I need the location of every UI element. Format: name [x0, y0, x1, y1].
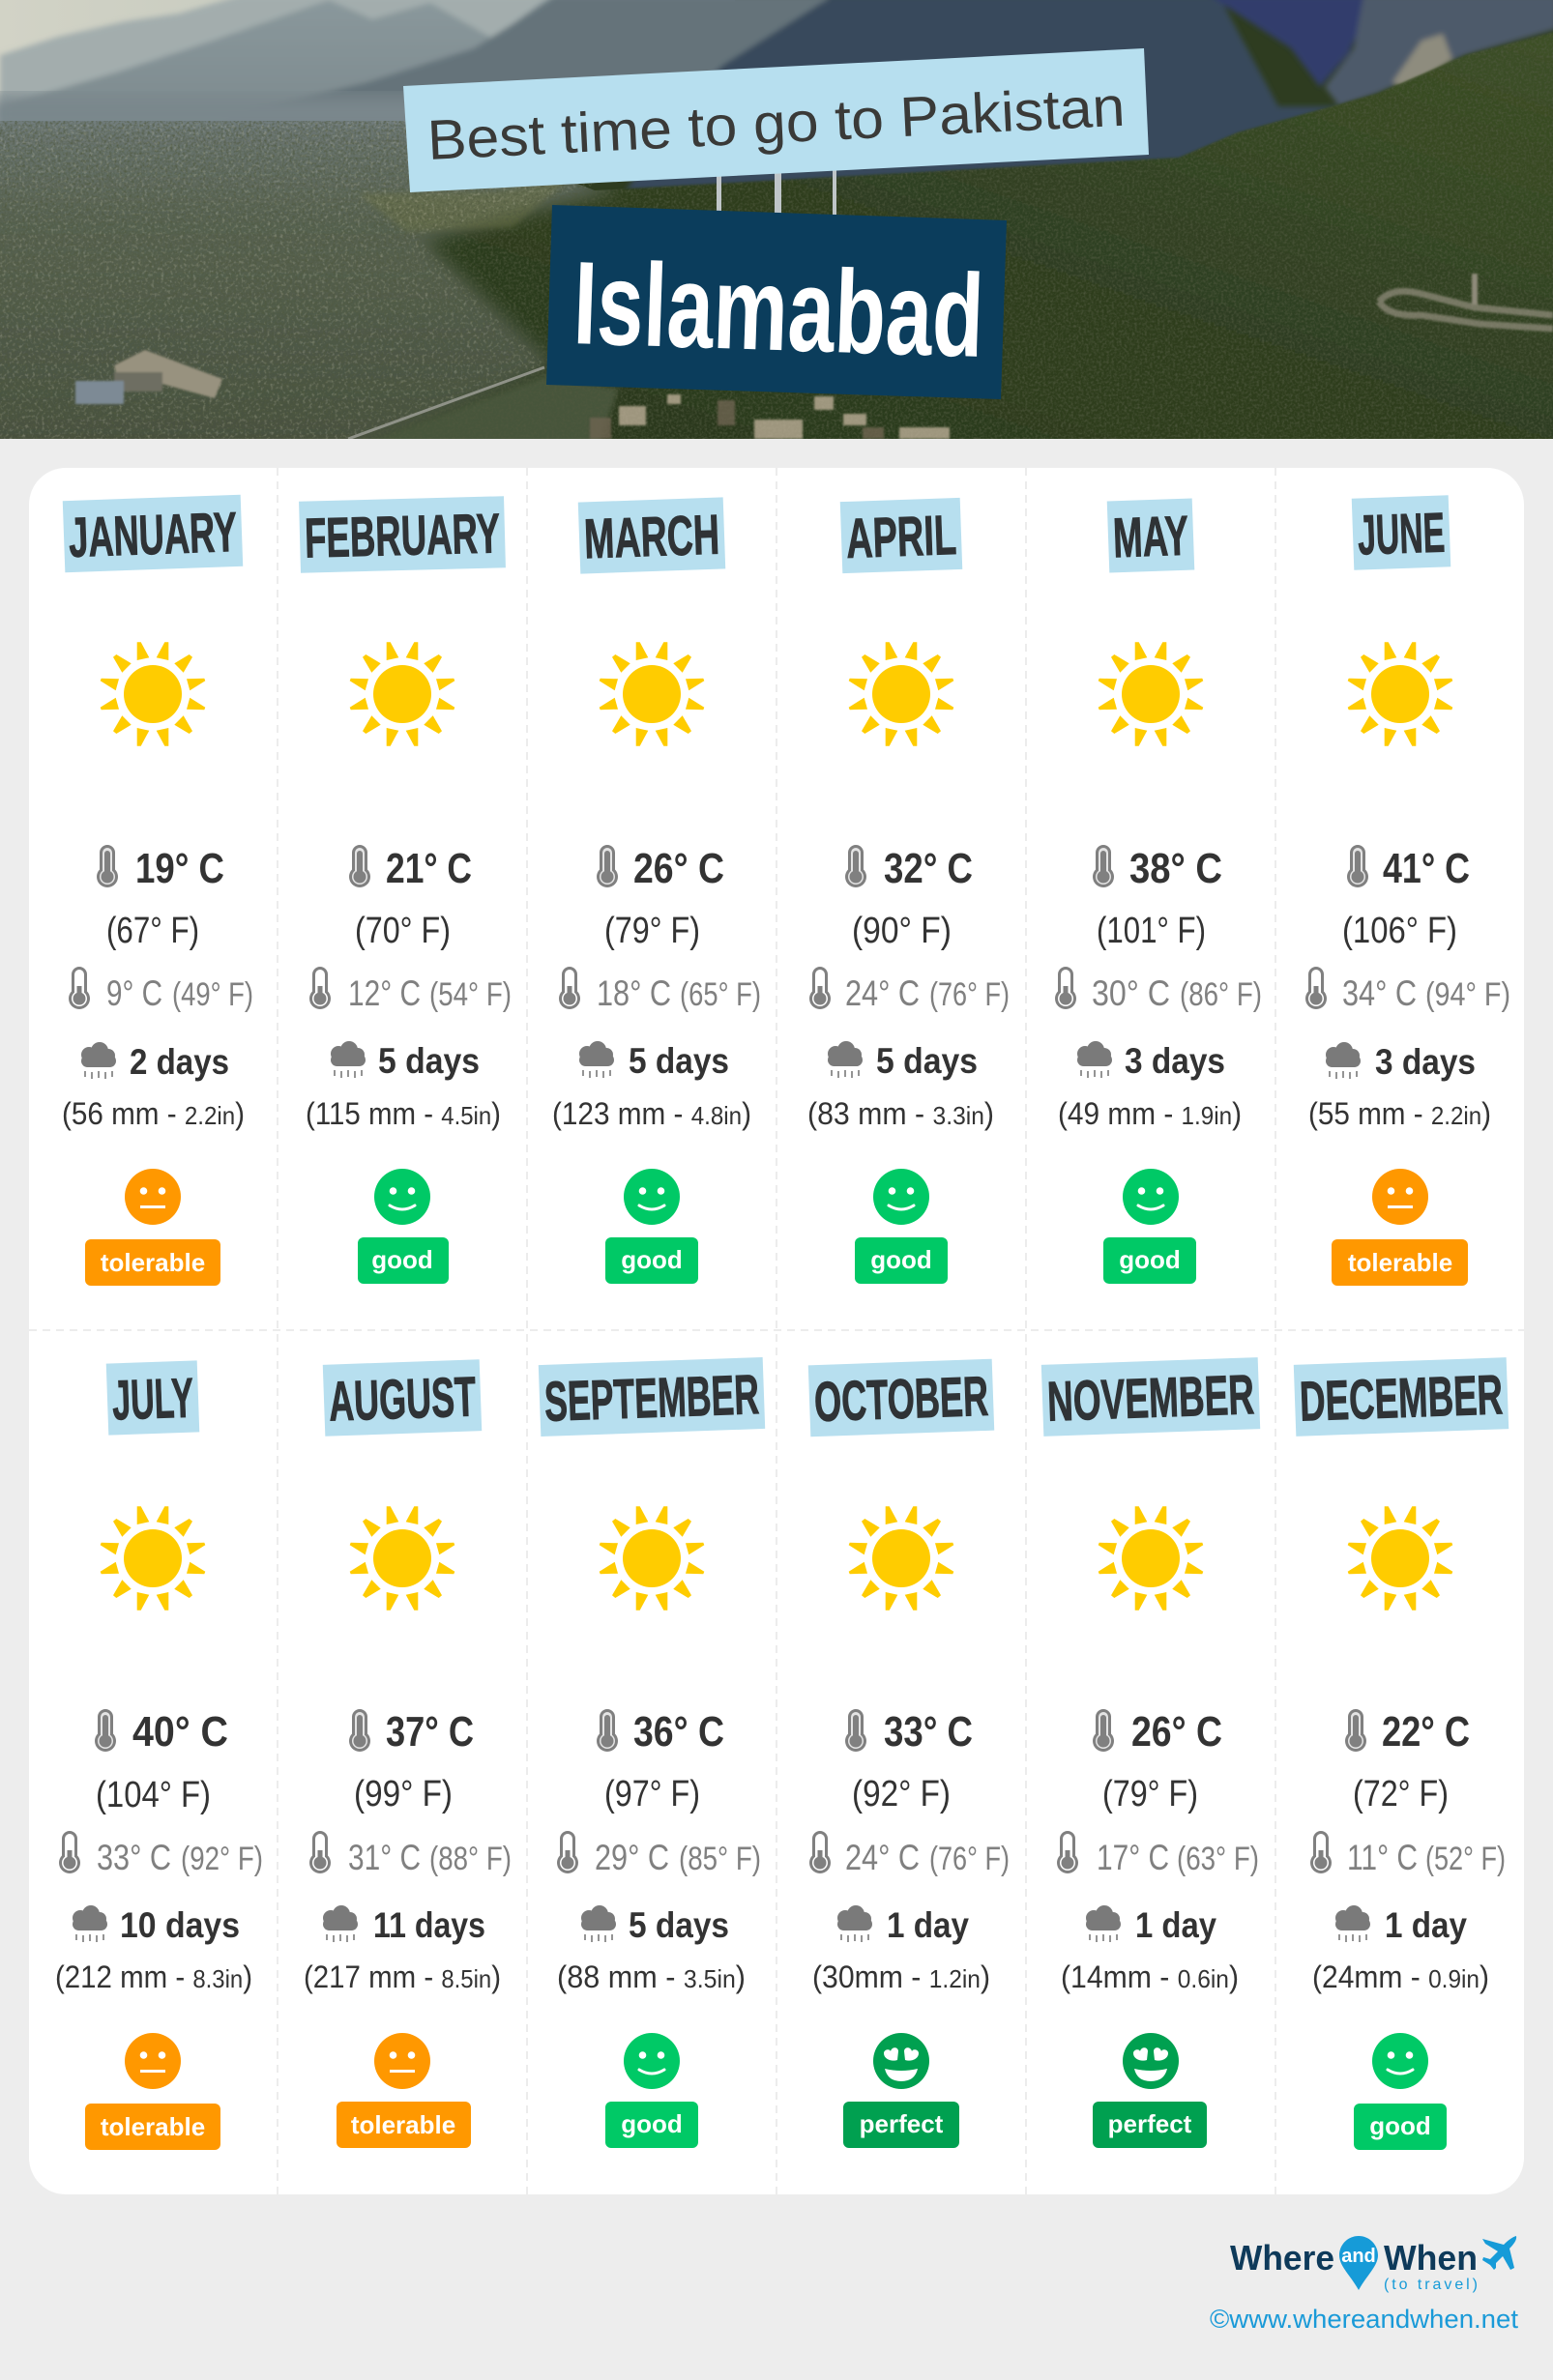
rainfall amount: (56 mm - 2.2in)	[62, 1096, 245, 1131]
rating: tolerable: tolerable	[101, 1248, 205, 1277]
rating: tolerable	[85, 2033, 220, 2150]
heading: September: SEPTEMBER	[543, 1363, 760, 1434]
heading: September	[539, 1357, 765, 1437]
rainfall amount: (30mm - 1.2in)	[812, 1959, 990, 1994]
low temperature: 17° C	[1097, 1838, 1169, 1877]
rating: good	[358, 1169, 449, 1284]
rainfall amount: (55 mm - 2.2in)	[1308, 1096, 1491, 1131]
low temperature	[1057, 1831, 1259, 1877]
panel: monthly calendar card	[29, 468, 1524, 2194]
heading: July: JULY	[111, 1367, 194, 1432]
heading: May: MAY	[1112, 505, 1189, 569]
low temperature: (76° F)	[929, 976, 1010, 1013]
rain days: 2 days	[130, 1042, 229, 1082]
rating: good	[1354, 2033, 1447, 2150]
icon: map pin: and	[1341, 2246, 1376, 2267]
rainfall amount: (115 mm - 4.5in)	[306, 1096, 501, 1131]
rain days	[81, 1042, 229, 1082]
heading: May	[1107, 498, 1194, 573]
low temperature	[559, 967, 761, 1013]
rainfall amount: (123 mm - 4.8in)	[552, 1096, 751, 1131]
high temperature: 33° C	[884, 1708, 973, 1756]
low temperature: 31° C	[348, 1838, 421, 1877]
rainfall amount: (217 mm - 8.5in)	[304, 1959, 501, 1994]
high temperature	[97, 845, 224, 892]
copyright url: ©www.whereandwhen.net	[1210, 2305, 1519, 2334]
heading: March	[578, 497, 725, 574]
banner: Best time to go to Pakistan: Best time to go to Pakistan	[425, 75, 1127, 172]
rating: tolerable: tolerable	[101, 2112, 205, 2141]
rain days: 5 days	[629, 1905, 729, 1945]
logo: Where and When to travel	[1230, 2236, 1516, 2293]
panel: April	[807, 498, 1010, 1284]
high temperature: 19° C	[135, 845, 224, 892]
rain days: 10 days	[120, 1905, 240, 1945]
panel: June	[1305, 495, 1510, 1286]
low temperature: (94° F)	[1425, 976, 1510, 1013]
low temperature: (52° F)	[1425, 1841, 1506, 1877]
icon: sun	[1348, 642, 1452, 746]
rating: good: good	[1119, 1245, 1181, 1274]
low temperature	[309, 967, 512, 1013]
rating: good	[1103, 1169, 1196, 1284]
low temperature: 12° C	[348, 973, 421, 1013]
high temperature: 32° C	[884, 845, 973, 892]
high temperature fahrenheit: (72° F)	[1353, 1774, 1449, 1814]
high temperature fahrenheit: (99° F)	[354, 1774, 453, 1814]
rating: tolerable	[1332, 1169, 1468, 1286]
rain days: 5 days	[378, 1041, 480, 1081]
rating: perfect	[1093, 2033, 1207, 2148]
high temperature: 21° C	[386, 845, 472, 892]
rating: good	[855, 1169, 948, 1284]
heading: October	[808, 1359, 994, 1437]
high temperature	[845, 1708, 973, 1756]
heading: August	[323, 1359, 482, 1437]
high temperature	[349, 845, 472, 892]
panel: May	[1055, 498, 1262, 1284]
high temperature: 37° C	[386, 1708, 474, 1756]
high temperature: 36° C	[633, 1708, 724, 1756]
high temperature fahrenheit: (67° F)	[106, 911, 199, 951]
low temperature	[809, 967, 1010, 1013]
low temperature: (88° F)	[429, 1841, 512, 1877]
panel: December	[1294, 1357, 1509, 2150]
banner: Islamabad	[546, 205, 1007, 399]
low temperature: 24° C	[845, 1838, 920, 1877]
logo: Where and When to travel: (to travel)	[1384, 2277, 1478, 2293]
low temperature: (54° F)	[429, 976, 512, 1013]
panel: March	[552, 497, 761, 1284]
rain days: 3 days	[1375, 1042, 1476, 1082]
high temperature fahrenheit: (101° F)	[1097, 911, 1206, 951]
rating: good	[605, 1169, 698, 1284]
low temperature	[557, 1831, 761, 1877]
low temperature: 34° C	[1342, 973, 1417, 1013]
rating: good: good	[621, 2109, 683, 2138]
rating: tolerable: tolerable	[351, 2110, 455, 2139]
low temperature: (63° F)	[1177, 1841, 1259, 1877]
low temperature	[59, 1831, 263, 1877]
high temperature	[1345, 1708, 1470, 1756]
low temperature: (85° F)	[679, 1841, 761, 1877]
rating: good: good	[1369, 2111, 1431, 2140]
heading: April: APRIL	[845, 504, 957, 570]
rain days	[579, 1041, 729, 1081]
icon: sun	[101, 642, 205, 746]
rainfall amount: (49 mm - 1.9in)	[1058, 1096, 1242, 1131]
rainfall amount: (14mm - 0.6in)	[1061, 1959, 1239, 1994]
panel: November	[1041, 1357, 1260, 2148]
high temperature fahrenheit: (70° F)	[355, 911, 451, 951]
rainfall amount: (24mm - 0.9in)	[1312, 1959, 1489, 1994]
icon: map pin	[1339, 2236, 1378, 2290]
icon: sun	[600, 642, 704, 746]
rainfall amount: (83 mm - 3.3in)	[807, 1096, 994, 1131]
rating: tolerable	[85, 1169, 220, 1286]
heading: February: FEBRUARY	[304, 502, 501, 570]
icon: sun	[1099, 1506, 1203, 1611]
low temperature: 24° C	[845, 973, 920, 1013]
rain days	[581, 1905, 729, 1945]
high temperature	[349, 1708, 474, 1756]
low temperature: 30° C	[1092, 973, 1170, 1013]
panel: July	[55, 1360, 263, 2150]
rain days	[331, 1041, 480, 1081]
rain days: 1 day	[887, 1905, 969, 1945]
rating: good: good	[621, 1245, 683, 1274]
icon: sun	[1099, 642, 1203, 746]
low temperature: 33° C	[97, 1838, 171, 1877]
high temperature	[597, 1708, 724, 1756]
rain days: 11 days	[373, 1905, 485, 1945]
rain days	[1077, 1041, 1225, 1081]
heading: February	[299, 496, 506, 573]
rating: good	[605, 2033, 698, 2148]
high temperature: 26° C	[633, 845, 724, 892]
logo: Where and When to travel: Where	[1230, 2238, 1334, 2278]
low temperature: (86° F)	[1180, 976, 1262, 1013]
rating: perfect: perfect	[860, 2109, 944, 2138]
high temperature: 38° C	[1129, 845, 1222, 892]
heading: July	[106, 1360, 199, 1436]
heading: January: JANUARY	[68, 501, 238, 569]
low temperature	[1310, 1831, 1506, 1877]
high temperature fahrenheit: (90° F)	[852, 911, 952, 951]
rain days	[1326, 1042, 1476, 1082]
panel: September	[539, 1357, 765, 2148]
high temperature	[95, 1708, 228, 1756]
low temperature	[309, 1831, 512, 1877]
icon: sun	[350, 642, 454, 746]
heading: April	[840, 498, 962, 573]
rain days	[837, 1905, 969, 1945]
rating: tolerable	[337, 2033, 471, 2148]
logo: Where and When to travel: When	[1384, 2238, 1478, 2278]
high temperature	[597, 845, 724, 892]
high temperature	[1093, 1708, 1222, 1756]
low temperature	[1055, 967, 1262, 1013]
rating: good: good	[870, 1245, 932, 1274]
icon: sun	[1348, 1506, 1452, 1611]
high temperature	[1347, 845, 1470, 892]
rain days: 1 day	[1135, 1905, 1216, 1945]
heading: January	[63, 495, 243, 572]
minarets	[717, 170, 836, 215]
rain days	[73, 1905, 240, 1945]
low temperature: (65° F)	[680, 976, 761, 1013]
low temperature	[1305, 967, 1510, 1013]
icon: sun	[849, 1506, 953, 1611]
panel: February	[299, 496, 512, 1284]
banner: Best time to go to Pakistan	[403, 48, 1149, 192]
low temperature: 11° C	[1347, 1838, 1418, 1877]
panel: August	[304, 1359, 512, 2148]
rain days	[1335, 1905, 1467, 1945]
low temperature: 9° C	[106, 973, 162, 1013]
panel: October	[808, 1359, 1010, 2148]
rain days: 5 days	[629, 1041, 729, 1081]
icon: sun	[600, 1506, 704, 1611]
high temperature: 26° C	[1131, 1708, 1222, 1756]
heading: August: AUGUST	[328, 1365, 477, 1434]
rating: perfect	[843, 2033, 959, 2148]
rating: perfect: perfect	[1108, 2109, 1192, 2138]
rain days	[1086, 1905, 1216, 1945]
rainfall amount: (88 mm - 3.5in)	[557, 1959, 746, 1994]
icon: airplane	[1482, 2236, 1516, 2270]
high temperature	[845, 845, 973, 892]
high temperature fahrenheit: (106° F)	[1342, 911, 1457, 951]
heading: November	[1041, 1357, 1260, 1437]
rain days: 3 days	[1125, 1041, 1225, 1081]
high temperature	[1093, 845, 1222, 892]
low temperature: (92° F)	[181, 1841, 263, 1877]
low temperature: 29° C	[595, 1838, 669, 1877]
rain days	[323, 1905, 485, 1945]
panel: January	[62, 495, 253, 1286]
heading: June: JUNE	[1357, 501, 1446, 567]
low temperature: (49° F)	[172, 976, 253, 1013]
high temperature: 22° C	[1382, 1708, 1470, 1756]
high temperature fahrenheit: (97° F)	[604, 1774, 700, 1814]
icon: sun	[350, 1506, 454, 1611]
high temperature fahrenheit: (92° F)	[852, 1774, 951, 1814]
rating: tolerable: tolerable	[1348, 1248, 1452, 1277]
low temperature: (76° F)	[929, 1841, 1010, 1877]
high temperature fahrenheit: (79° F)	[604, 911, 700, 951]
icon: sun	[849, 642, 953, 746]
header photo: Islamabad and Margalla hills	[0, 0, 1553, 464]
rain days	[828, 1041, 978, 1081]
high temperature fahrenheit: (79° F)	[1102, 1774, 1198, 1814]
banner: Islamabad: Islamabad	[571, 237, 985, 382]
high temperature fahrenheit: (104° F)	[96, 1775, 211, 1815]
heading: November: NOVEMBER	[1046, 1363, 1255, 1434]
rain days: 1 day	[1385, 1905, 1467, 1945]
heading: March: MARCH	[583, 504, 720, 570]
rainfall amount: (212 mm - 8.3in)	[55, 1959, 252, 1994]
rating: good: good	[371, 1245, 433, 1274]
low temperature: 18° C	[597, 973, 671, 1013]
high temperature: 40° C	[132, 1708, 228, 1756]
rain days: 5 days	[876, 1041, 978, 1081]
low temperature	[809, 1831, 1010, 1877]
heading: October: OCTOBER	[813, 1365, 989, 1434]
low temperature	[69, 967, 253, 1013]
heading: June	[1352, 495, 1450, 570]
high temperature: 41° C	[1383, 845, 1470, 892]
icon: sun	[101, 1506, 205, 1611]
